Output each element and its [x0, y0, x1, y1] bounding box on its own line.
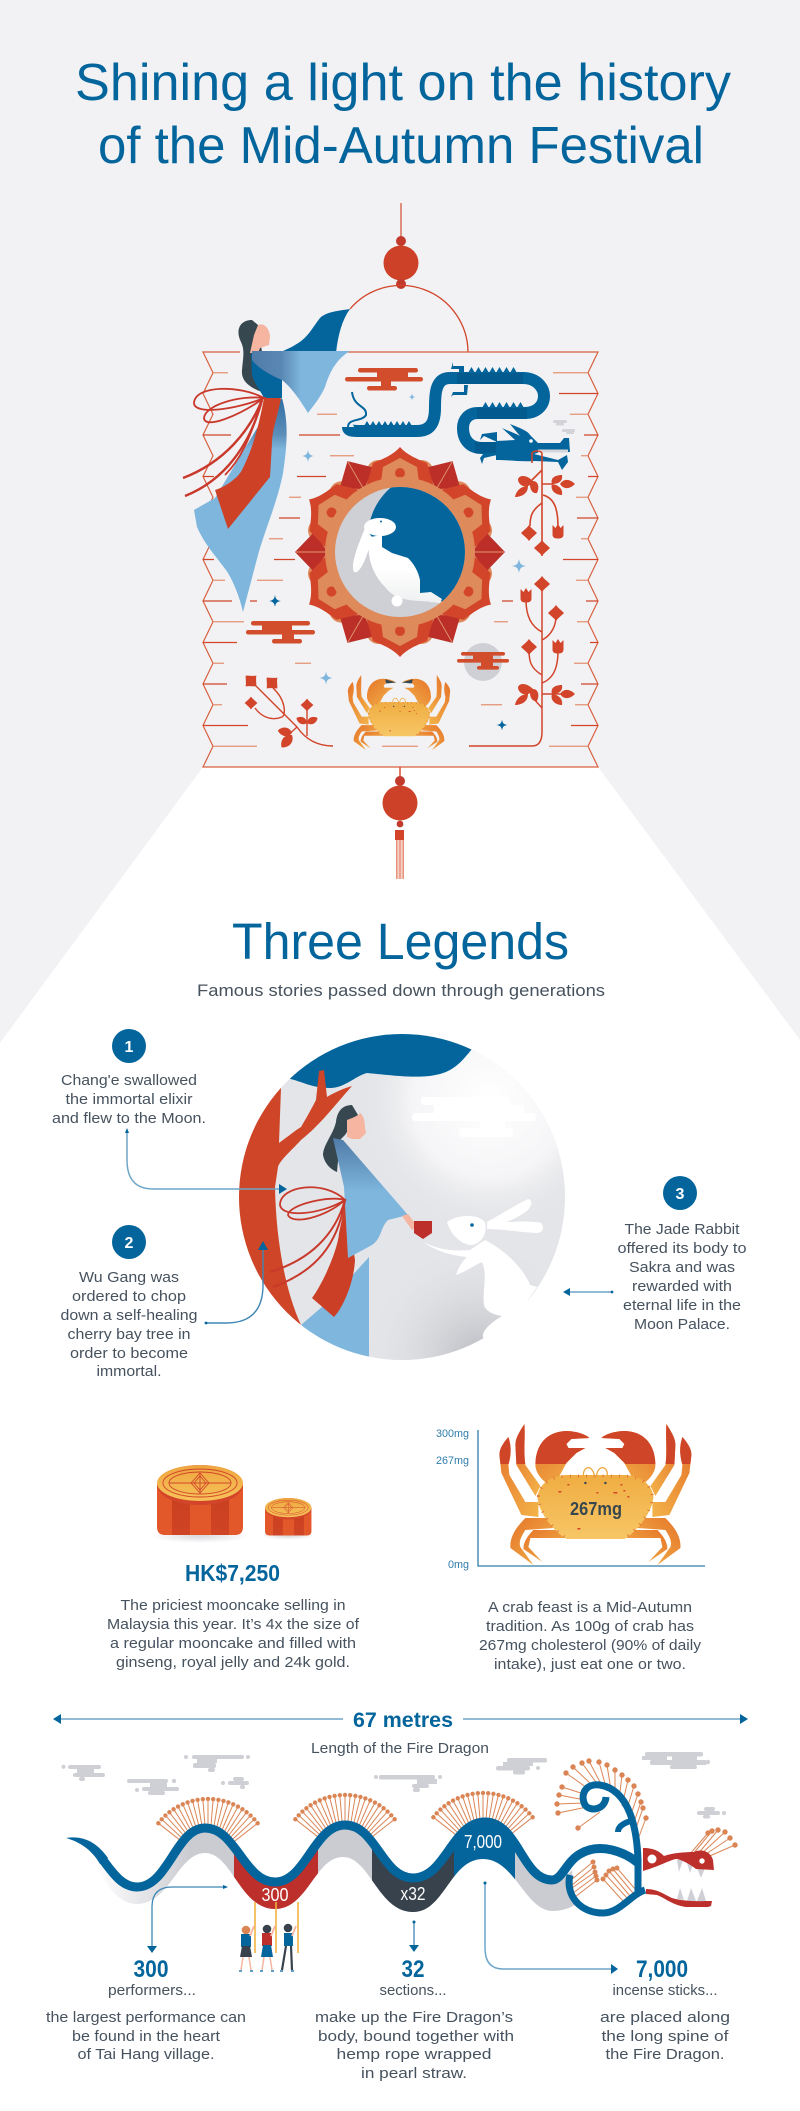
mooncake text: The priciest mooncake selling in [120, 1597, 346, 1614]
segment labels: 7,000 [464, 1832, 502, 1852]
stat: 7,000 incense sticks: incense sticks... [612, 1982, 718, 1999]
cloud: top centre [345, 368, 423, 390]
axis labels [436, 1428, 469, 1571]
icon: large mooncake [150, 1465, 250, 1543]
face [347, 1113, 366, 1139]
legend 2: text: cherry bay tree in [68, 1326, 190, 1343]
white clouds [412, 1097, 536, 1137]
jade rabbit on crescent moon [353, 518, 442, 606]
arrow: story 2 [205, 1241, 268, 1324]
stat: 32 sections: sections... [380, 1982, 446, 1999]
performer 1 [239, 1926, 254, 1971]
title: of the Mid-Autumn Festival [98, 117, 704, 175]
sash [270, 1187, 345, 1287]
legend 2: text: Wu Gang was [79, 1269, 179, 1286]
chart axes [478, 1430, 705, 1566]
carrying poles [255, 1902, 298, 1953]
axis labels: 0mg [448, 1559, 469, 1571]
body ribbon [110, 1826, 574, 1912]
crab text: 267mg cholesterol (90% of daily [479, 1637, 702, 1654]
dragon upper jaw [643, 1848, 714, 1871]
sparkle stars [269, 394, 526, 730]
plant: lower left vine [240, 670, 333, 750]
stat: 7,000 incense sticks: are placed along [600, 2009, 730, 2026]
lantern arc handle [350, 285, 468, 352]
legend 1: text: the immortal elixir [66, 1091, 192, 1108]
red skirt panel [215, 398, 281, 529]
red skirt panel [312, 1200, 355, 1317]
legend 1: text: Chang'e swallowed [61, 1072, 197, 1089]
legend 2: number badge: 2 [125, 1235, 134, 1252]
light beam panel [0, 767, 800, 2111]
mooncake text: a regular mooncake and filled with [110, 1635, 356, 1652]
illustration: lantern [183, 203, 598, 879]
moon illustration [230, 1030, 570, 1365]
hair [323, 1105, 358, 1172]
stat: 32 sections: make up the Fire Dragon’s [315, 2009, 513, 2026]
dragon lower jaw [646, 1889, 712, 1907]
robe skirt [300, 1257, 369, 1365]
head fan sticks [555, 1759, 737, 1901]
lantern crab [348, 675, 450, 750]
segment labels: x32 [400, 1884, 426, 1904]
stat: 32 sections: in pearl straw. [361, 2065, 467, 2082]
stat: 300 performers: of Tai Hang village. [78, 2046, 214, 2063]
lantern frame [203, 352, 598, 767]
sleeve [252, 351, 350, 413]
stat: 32 sections: 32 [402, 1956, 424, 1983]
dragon teeth [677, 1860, 706, 1901]
legend 2: text: down a self-healing [60, 1307, 198, 1324]
legend 2: text: order to become [70, 1345, 188, 1362]
legend 3: text [618, 1221, 746, 1333]
stat: 300 performers: be found in the heart [72, 2028, 221, 2045]
mooncake text [107, 1597, 360, 1671]
dress skirt [194, 398, 287, 612]
spine [66, 1785, 645, 1913]
cloud: lower left [246, 621, 315, 644]
legend 3: text: Sakra and was [629, 1259, 735, 1276]
legend 3: text: The Jade Rabbit [624, 1221, 740, 1238]
legend 3: number badge: 3 [676, 1186, 685, 1203]
legend 1: number badge: 1 [125, 1039, 134, 1056]
mandala medallion [293, 447, 507, 657]
legend 1: text [52, 1072, 206, 1127]
stat: 7,000 incense sticks: 7,000 [636, 1956, 688, 1983]
legend 1: number badge [112, 1029, 146, 1063]
stat: 32 sections: body, bound together with [318, 2028, 514, 2045]
incense fans [155, 1797, 261, 1843]
lantern woman [183, 309, 350, 612]
blue shawl [283, 309, 350, 353]
red cup [414, 1221, 432, 1239]
hair [238, 320, 262, 392]
torso [251, 353, 282, 398]
dragon length caption: Length of the Fire Dragon [311, 1740, 489, 1757]
plant: upper right vine [515, 451, 575, 556]
grey clouds [62, 1752, 726, 1818]
mooncake text: Malaysia this year. It’s 4x the size of [107, 1616, 360, 1633]
dragon length value: 67 metres [353, 1709, 453, 1732]
stat: 300 performers: performers... [108, 1982, 196, 1999]
dragon eyes [648, 1854, 705, 1864]
stat: 32 sections: hemp rope wrapped [336, 2046, 492, 2063]
crab value: 267mg [570, 1499, 622, 1519]
crab [499, 1424, 691, 1565]
stat: 7,000 incense sticks [600, 1956, 730, 2063]
subheading: Famous stories passed down through generations [197, 981, 605, 1000]
legend 3: text: offered its body to [618, 1240, 746, 1257]
arrow: dragon length [53, 1714, 748, 1724]
small grey clouds [553, 420, 575, 434]
segment labels [262, 1832, 502, 1905]
legend 1: text: and flew to the Moon. [52, 1110, 206, 1127]
arrow: 300 performers [147, 1885, 228, 1953]
performers [239, 1902, 298, 1971]
moon disc and cloud lower right [457, 643, 509, 681]
face [250, 324, 270, 353]
robe [333, 1138, 408, 1258]
cherry bay tree [230, 1070, 352, 1330]
heading: Three Legends: Three Legends [232, 913, 569, 970]
legend 3: text: Moon Palace. [634, 1316, 730, 1333]
sash [183, 389, 264, 496]
arrow: story 1 [125, 1128, 287, 1194]
crab text: tradition. As 100g of crab has [486, 1618, 694, 1635]
axis labels: 267mg [436, 1455, 469, 1467]
stat: 7,000 incense sticks: the long spine of [602, 2028, 729, 2045]
fire dragon [66, 1759, 737, 1930]
legend 3: number badge [663, 1176, 697, 1210]
mooncake price: HK$7,250 [185, 1560, 280, 1586]
stat: 300 performers: 300 [134, 1956, 168, 1983]
crab text: A crab feast is a Mid-Autumn [488, 1599, 692, 1616]
plant: right vine with flowers [469, 576, 575, 746]
title [75, 54, 731, 175]
mooncake text: ginseng, royal jelly and 24k gold. [116, 1654, 350, 1671]
stat: 300 performers: the largest performance can [46, 2009, 246, 2026]
lantern bottom tassel [382, 767, 418, 879]
hand [402, 1214, 417, 1230]
arrow: 7,000 sticks [484, 1882, 618, 1974]
legend 2: text [60, 1269, 198, 1380]
segment labels: 300 [262, 1885, 288, 1905]
legend 2: text: immortal. [96, 1363, 162, 1380]
legend 2: number badge [112, 1225, 146, 1259]
arrow: 32 sections [409, 1920, 419, 1952]
stat: 300 performers [46, 1956, 246, 2063]
moon disc [275, 1073, 565, 1360]
stat: 32 sections [315, 1956, 514, 2082]
serpent dragon [348, 362, 570, 470]
crab cholesterol chart [436, 1424, 705, 1571]
legend 3: text: eternal life in the [623, 1297, 741, 1314]
crab text [479, 1599, 702, 1673]
performer 3 [280, 1924, 296, 1971]
performer 2 [260, 1925, 275, 1971]
arrow: story 3 [563, 1288, 613, 1296]
icon: small mooncake [261, 1498, 315, 1540]
title: Shining a light on the history [75, 54, 731, 112]
legend 2: text: ordered to chop [72, 1288, 186, 1305]
woman with cup [270, 1105, 432, 1317]
lantern top knot [384, 203, 418, 289]
blue sky canopy [290, 1034, 472, 1088]
axis labels: 300mg [436, 1428, 469, 1440]
legend 3: text: rewarded with [632, 1278, 732, 1295]
crab text: intake), just eat one or two. [494, 1656, 686, 1673]
stat: 7,000 incense sticks: the Fire Dragon. [606, 2046, 724, 2063]
white rabbit [423, 1199, 543, 1343]
